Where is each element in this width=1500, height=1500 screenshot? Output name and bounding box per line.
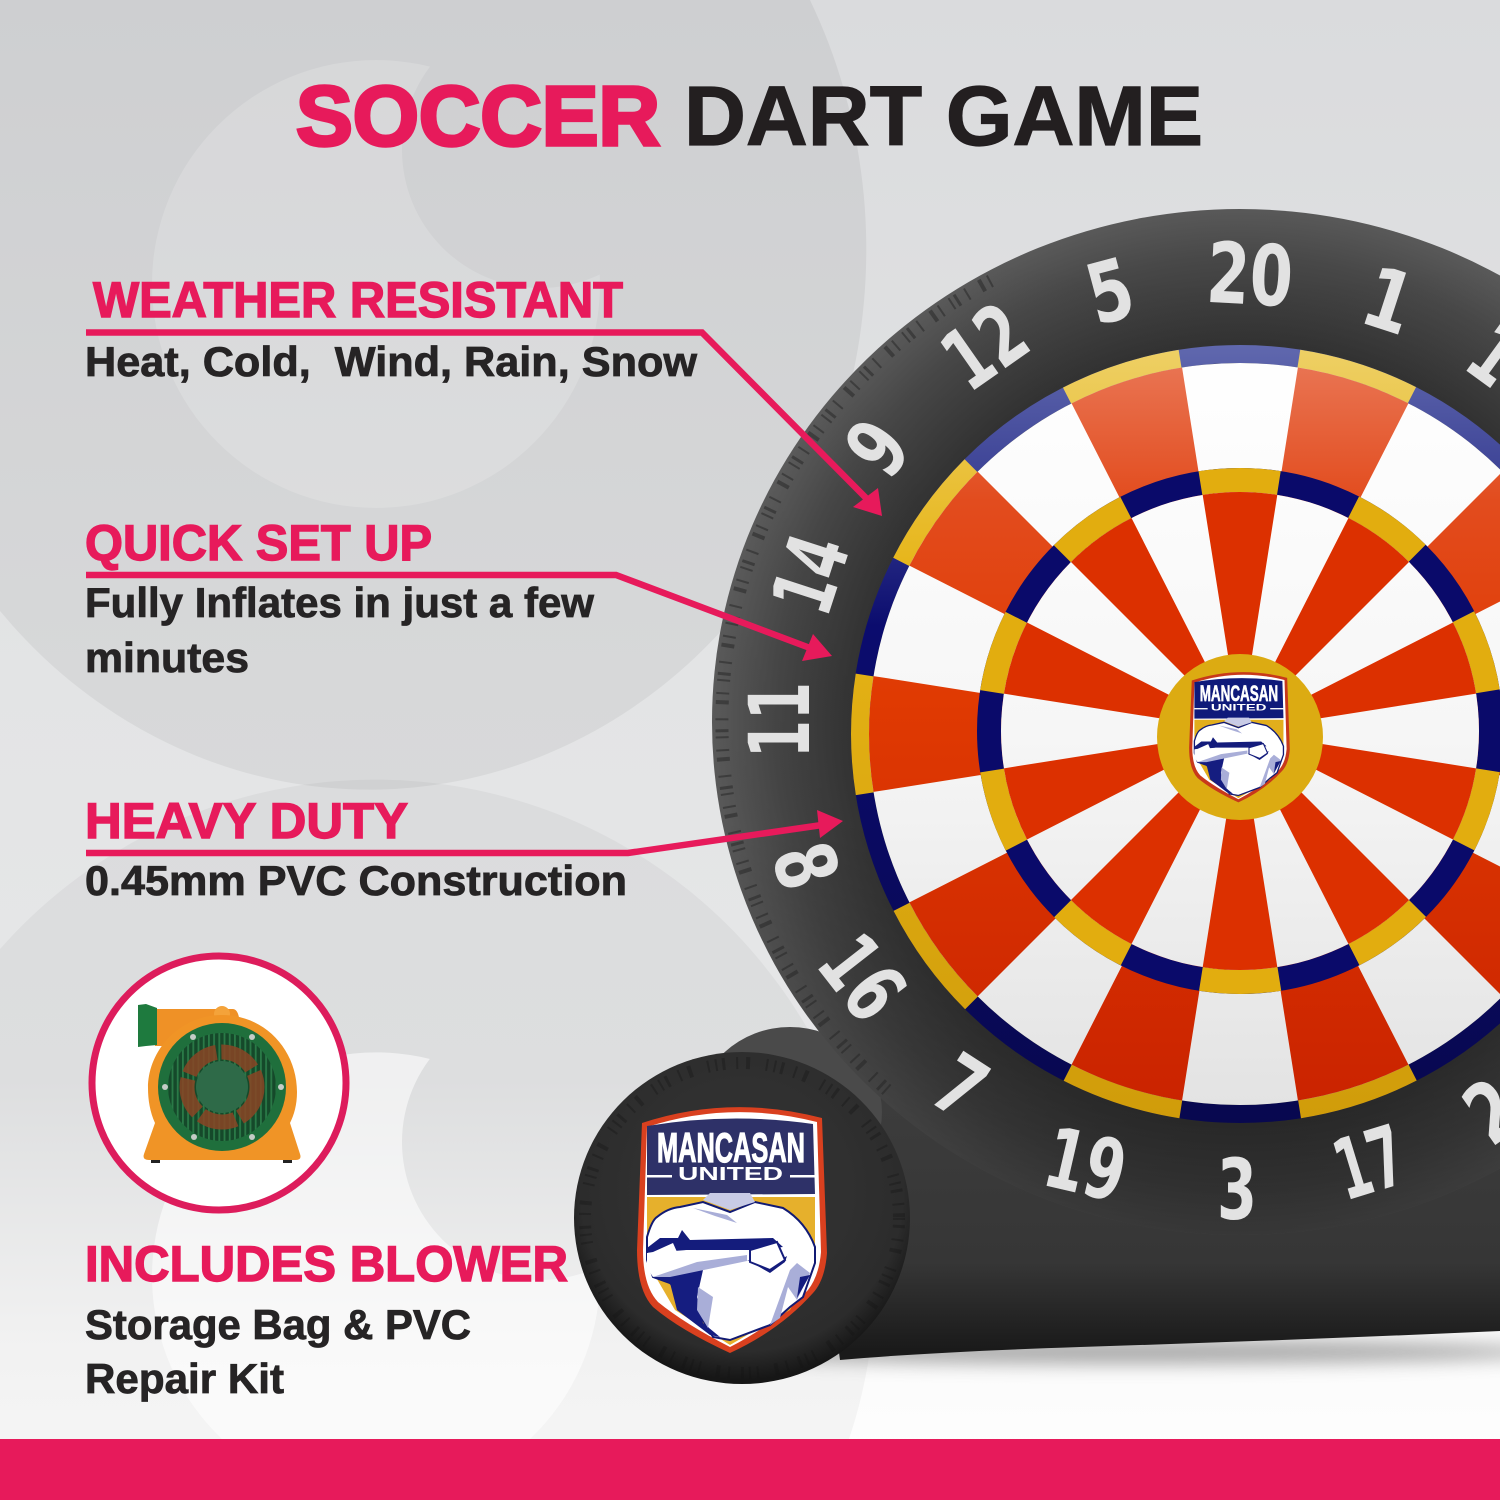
blower grille	[168, 1033, 276, 1141]
ring numbers: 5	[1076, 239, 1144, 345]
hub crest: MANCASAN	[1200, 681, 1278, 706]
feature: includes blower: Repair Kit	[85, 1355, 284, 1402]
arrow: quick set up	[86, 575, 832, 661]
feature: quick set up: Fully Inflates in just a few	[85, 579, 594, 626]
hub crest: UNITED	[1211, 703, 1267, 714]
feature: includes blower: Storage Bag & PVC	[85, 1301, 471, 1348]
blower duct and dome	[155, 1009, 240, 1046]
bottom band	[0, 1439, 1500, 1500]
feature: weather resistant: WEATHER RESISTANT	[93, 272, 623, 328]
blower feet	[151, 1160, 292, 1163]
hub crest	[1189, 672, 1290, 802]
feature: heavy duty: HEAVY DUTY	[85, 793, 408, 849]
ring numbers: 9	[826, 402, 930, 494]
ring numbers: 16	[798, 916, 925, 1039]
back of blower housing bump	[698, 1027, 882, 1197]
ring numbers: 12	[924, 284, 1046, 410]
board rim	[860, 354, 1500, 1114]
ring numbers: 8	[752, 831, 858, 901]
middle ring	[989, 480, 1491, 982]
feature: includes blower	[85, 1236, 568, 1402]
ring numbers: 19	[1035, 1108, 1135, 1222]
feature: quick set up: QUICK SET UP	[85, 515, 432, 571]
outer wedges	[869, 363, 1500, 1105]
feature: quick set up	[85, 515, 594, 681]
icon: blower in circle	[92, 956, 346, 1210]
inflatable dartboard	[574, 209, 1500, 1384]
ring numbers: 1	[1351, 247, 1427, 355]
fan blades	[187, 1052, 257, 1122]
feature: includes blower: INCLUDES BLOWER	[85, 1236, 568, 1292]
blower body	[144, 1015, 300, 1160]
blower nozzle	[138, 1004, 157, 1047]
title: SOCCER	[296, 69, 660, 163]
ring numbers: 3	[1217, 1141, 1257, 1239]
title: DART GAME	[684, 69, 1203, 163]
floor shadow	[710, 1340, 1500, 1364]
inflatable base	[800, 1060, 1500, 1360]
centre hub	[1157, 654, 1323, 820]
large crest: UNITED	[678, 1164, 783, 1184]
outer black ring	[712, 209, 1500, 1235]
feature: heavy duty: 0.45mm PVC Construction	[85, 857, 627, 904]
title	[296, 69, 1203, 163]
inner wedges	[1001, 492, 1479, 970]
fan hub	[196, 1061, 248, 1113]
ring numbers: 17	[1323, 1106, 1416, 1220]
blower green ring	[158, 1023, 286, 1151]
ring numbers: 11	[731, 682, 829, 758]
ring numbers	[731, 224, 1500, 1239]
large crest	[637, 1107, 827, 1353]
ring numbers: 7	[916, 1034, 1004, 1140]
grille screws	[162, 1034, 284, 1140]
inflatable blower housing	[574, 1052, 910, 1384]
feature: heavy duty	[85, 793, 627, 904]
arrow: heavy duty	[86, 810, 843, 853]
feature: quick set up: minutes	[85, 634, 249, 681]
arrow: weather resistant	[86, 332, 882, 516]
ring numbers: 14	[753, 523, 869, 626]
large crest: MANCASAN	[657, 1124, 805, 1171]
feature: weather resistant: Heat, Cold, Wind, Rain, Snow	[85, 338, 697, 385]
feature: weather resistant	[85, 272, 697, 385]
ring numbers: 20	[1204, 224, 1295, 326]
